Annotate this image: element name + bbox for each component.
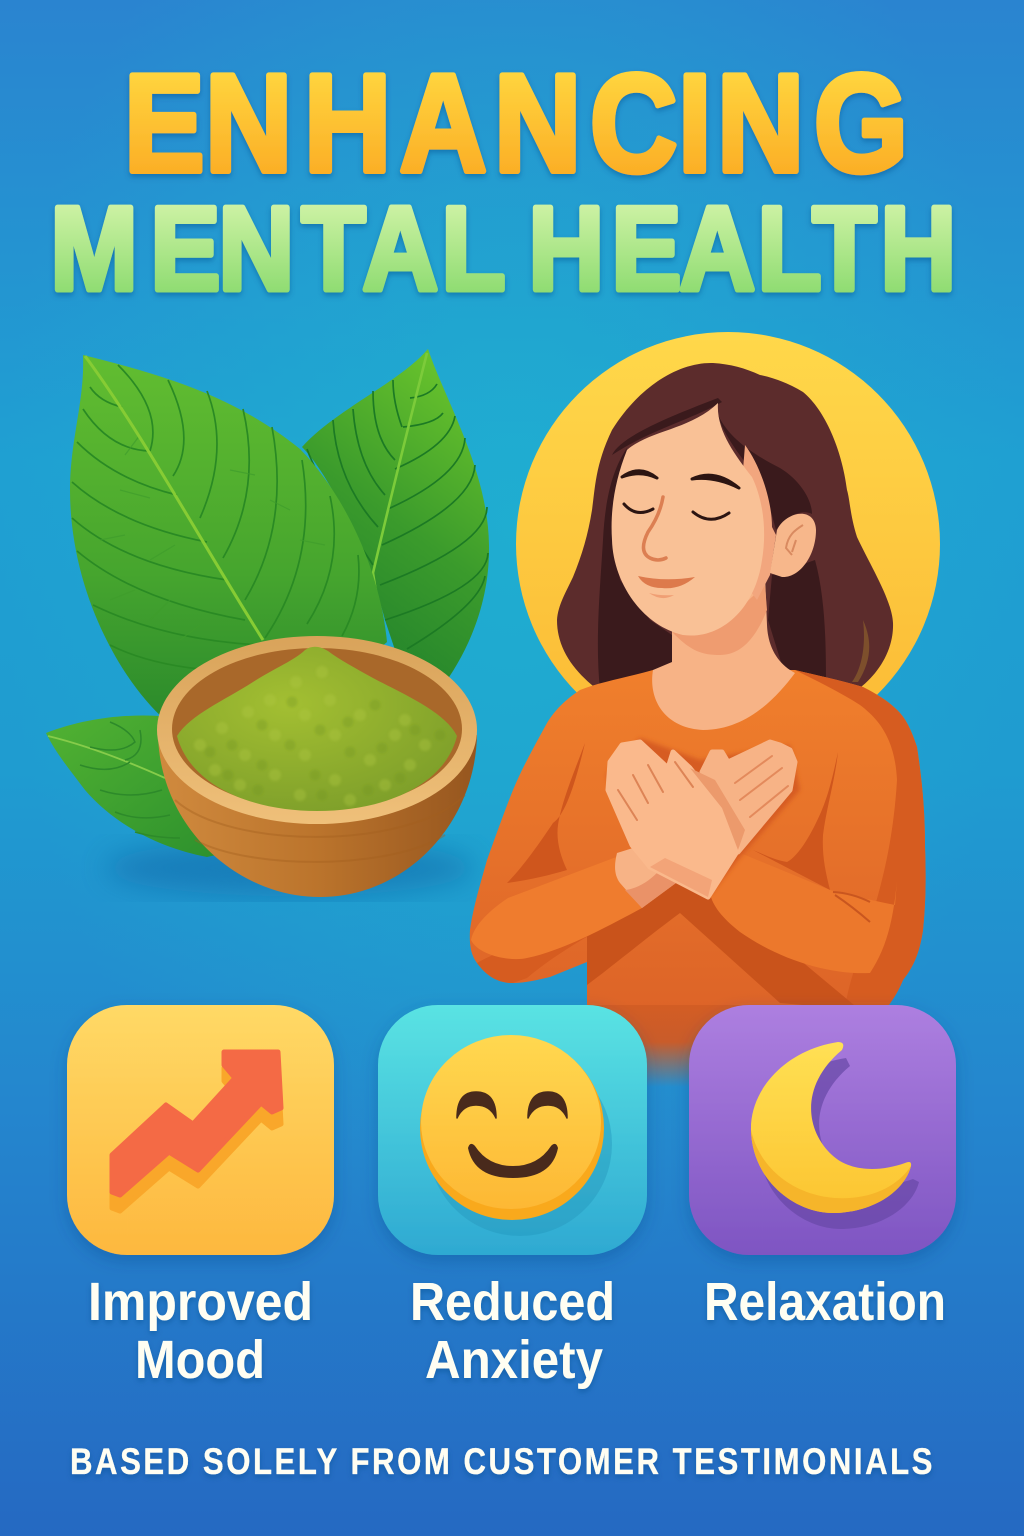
hair highlight	[852, 620, 869, 682]
neck	[652, 575, 795, 730]
benefit icons row	[67, 1005, 956, 1255]
label: reduced anxiety: Reduced	[410, 1272, 615, 1332]
label: reduced anxiety	[410, 1272, 615, 1390]
large leaf	[70, 355, 387, 720]
left hand on top	[608, 742, 745, 897]
skin behind face	[735, 445, 776, 600]
icon: rising arrow	[112, 1052, 281, 1211]
ear	[770, 514, 816, 577]
halo	[516, 332, 940, 756]
label: improved mood: Improved	[88, 1272, 313, 1332]
hair	[557, 363, 893, 690]
crossed hands	[606, 738, 800, 908]
hands shadow on sweater	[606, 738, 800, 895]
benefit labels	[88, 1272, 946, 1390]
tile: improved mood	[67, 1005, 334, 1255]
wooden bowl	[157, 636, 477, 897]
sweater fading behind tiles	[587, 1005, 885, 1087]
left forearm	[471, 848, 642, 959]
right hand behind	[702, 742, 795, 852]
icon: smiling face	[420, 1035, 612, 1236]
label: improved mood	[88, 1272, 313, 1390]
title	[51, 45, 956, 315]
label: relaxation: Relaxation	[704, 1272, 946, 1332]
nose	[643, 497, 666, 560]
label: reduced anxiety: Anxiety	[425, 1330, 603, 1390]
illustration: kratom leaves and powder bowl	[46, 349, 489, 897]
elbow creases	[833, 892, 870, 922]
ground shadow	[105, 840, 475, 896]
lower fist	[615, 848, 680, 908]
label: improved mood: Mood	[135, 1330, 265, 1390]
sweater right side shade	[795, 670, 926, 1010]
closed eyes	[624, 504, 729, 519]
right forearm	[710, 852, 897, 973]
orange sweater	[470, 670, 926, 1010]
chest shadow	[587, 880, 860, 1010]
face	[612, 403, 764, 636]
title line: Mental Health: MENTAL HEALTH	[51, 182, 956, 315]
dark under-hair	[598, 415, 826, 690]
green powder	[177, 647, 457, 811]
illustration: calm woman with golden halo	[470, 332, 940, 1087]
small leaf	[46, 716, 240, 857]
bowl rim	[157, 636, 477, 824]
sweater folds	[507, 743, 838, 890]
mouth	[638, 576, 695, 598]
eyebrows	[622, 471, 739, 488]
tile: relaxation	[689, 1005, 956, 1255]
title line: Enhancing: ENHANCING	[124, 45, 908, 201]
icon: crescent moon	[751, 1042, 919, 1229]
tile: reduced anxiety	[378, 1005, 647, 1255]
right leaf	[302, 349, 489, 690]
left arm underside	[477, 880, 640, 983]
